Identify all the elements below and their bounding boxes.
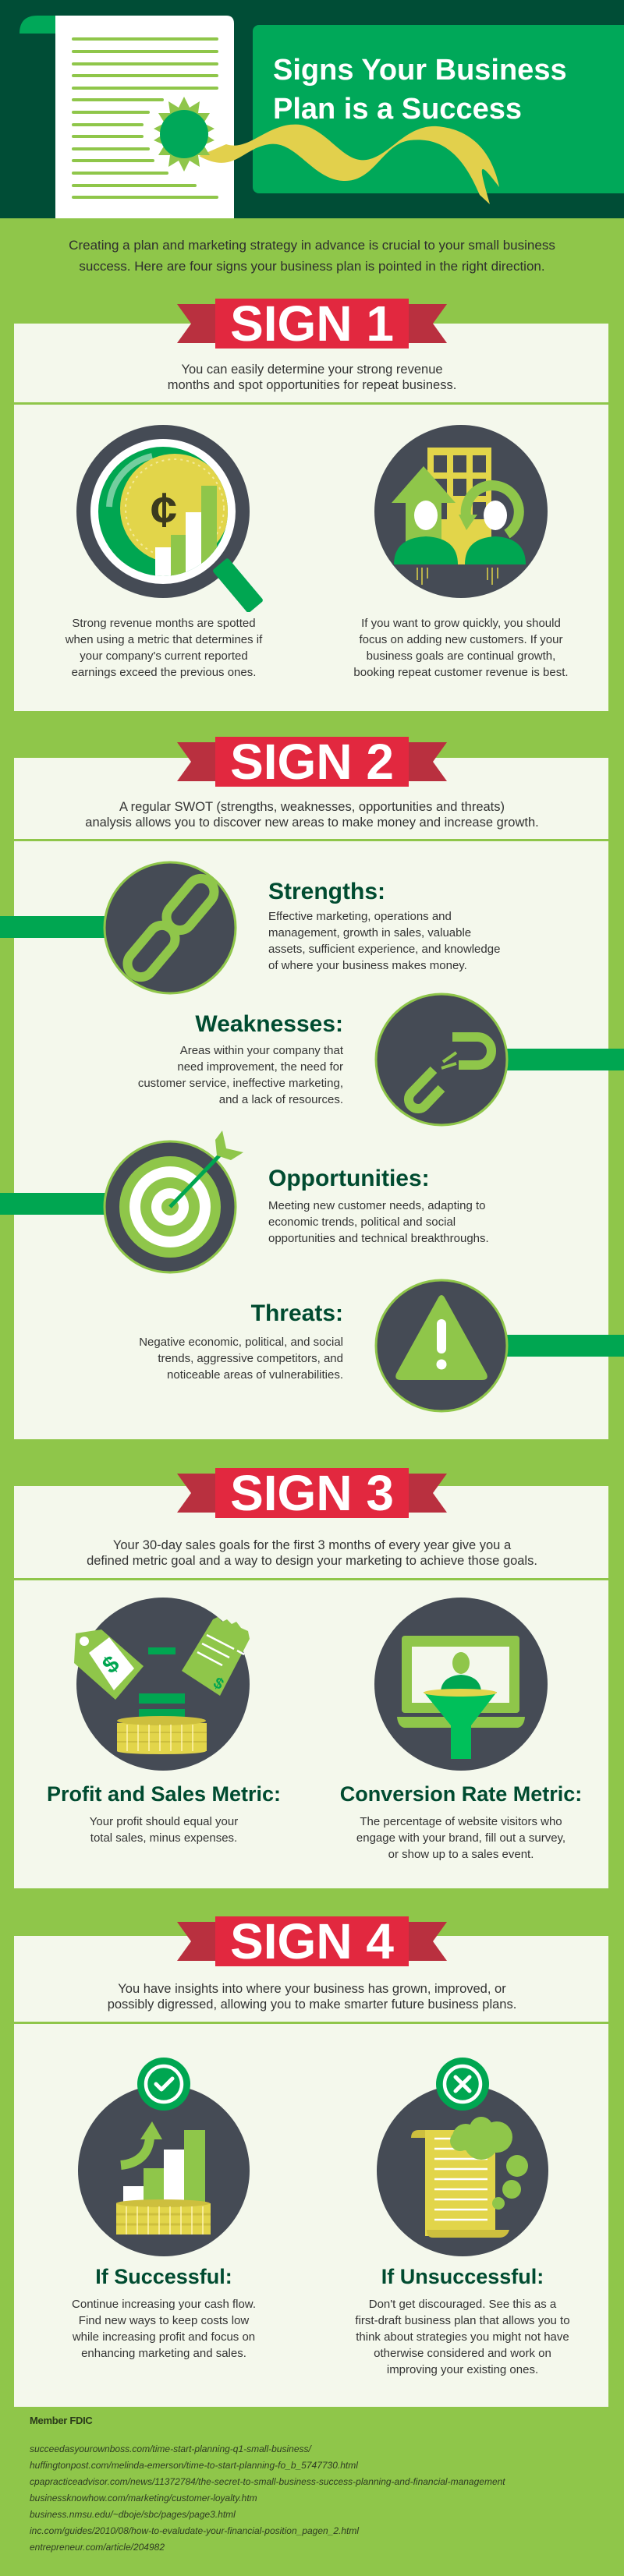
text: grow quickly: business goals are continual growth,	[367, 649, 555, 663]
conversion text	[356, 1815, 566, 1861]
panel: sign 1	[14, 324, 608, 711]
sign 3 intro: Your 30-day sales goals for the first 3 months of every year give you a	[113, 1538, 511, 1552]
footer: sources: entrepreneur.com/article/204982	[30, 2542, 165, 2553]
title: Plan is a Success	[273, 93, 522, 126]
opportunities heading: Opportunities:	[268, 1166, 430, 1191]
footer: sources: cpapracticeadvisor.com/news/11372784/the-secret-to-small-business-success-planning-and-financial-management	[30, 2476, 505, 2487]
text: revenue months: your company's current reported	[80, 649, 248, 663]
unsuccessful text: improving your existing ones.	[387, 2363, 538, 2376]
header banner	[0, 0, 624, 218]
weaknesses text: and a lack of resources.	[219, 1093, 343, 1106]
successful text: Continue increasing your cash flow.	[72, 2298, 256, 2311]
weaknesses text: Areas within your company that	[180, 1044, 343, 1057]
sign 2 intro	[85, 800, 539, 830]
badge: check	[137, 2058, 190, 2111]
sign 3 intro	[87, 1538, 537, 1568]
sign 4 intro: possibly digressed, allowing you to make smarter future business plans.	[108, 1997, 516, 2012]
opportunities text	[268, 1199, 489, 1245]
text: grow quickly	[353, 617, 569, 679]
text: grow quickly: If you want to grow quickly, you should	[361, 617, 561, 630]
unsuccessful heading: If Unsuccessful:	[381, 2265, 544, 2288]
title	[273, 54, 567, 126]
icon: magnifier with coin: ¢	[151, 483, 177, 537]
weaknesses text: customer service, ineffective marketing,	[138, 1077, 343, 1090]
weaknesses text	[138, 1044, 343, 1106]
icon: growth building and customers	[374, 425, 548, 598]
footer: member FDIC: Member FDIC	[30, 2415, 92, 2426]
conversion text: The percentage of website visitors who	[360, 1815, 562, 1828]
profit text	[90, 1815, 238, 1845]
panel: sign 3	[14, 1486, 608, 1888]
connector bars	[0, 916, 109, 938]
panel: sign 4	[14, 1936, 608, 2407]
intro text	[69, 238, 555, 274]
strengths text: Effective marketing, operations and	[268, 910, 452, 923]
sign 1 intro: You can easily determine your strong revenue	[181, 363, 443, 377]
sign 1 intro: months and spot opportunities for repeat business.	[168, 378, 456, 392]
conversion text: engage with your brand, fill out a survey,	[356, 1831, 566, 1845]
unsuccessful text: think about strategies you might not have	[356, 2330, 569, 2344]
sign 2 intro: analysis allows you to discover new areas to make money and increase growth.	[85, 816, 539, 830]
profit text: Your profit should equal your	[90, 1815, 238, 1828]
footer: sources: huffingtonpost.com/melinda-emerson/time-to-start-planning-fo_b_5747730.html	[30, 2460, 358, 2471]
successful text	[72, 2298, 256, 2360]
icon: success growth	[78, 2058, 250, 2256]
icon: magnifier with coin	[76, 425, 263, 612]
opportunities text: opportunities and technical breakthroughs.	[268, 1232, 489, 1245]
unsuccessful text	[355, 2298, 570, 2376]
sign 3 intro: defined metric goal and a way to design your marketing to achieve those goals.	[87, 1554, 537, 1568]
text: revenue months: earnings exceed the previous ones.	[72, 666, 256, 679]
profit heading: Profit and Sales Metric:	[47, 1782, 281, 1806]
icon: warning (threats)	[374, 1279, 509, 1413]
footer: sources: inc.com/guides/2010/08/how-to-evaludate-your-financial-position_pagen_2.html	[30, 2525, 359, 2536]
footer: sources: businessknowhow.com/marketing/customer-loyalty.htm	[30, 2493, 257, 2503]
strengths heading: Strengths:	[268, 879, 385, 904]
unsuccessful text: first-draft business plan that allows you to	[355, 2314, 570, 2327]
footer: sources: succeedasyourownboss.com/time-start-planning-q1-small-business/	[30, 2443, 311, 2454]
sign 4 intro	[108, 1982, 516, 2012]
strengths text: assets, sufficient experience, and knowledge	[268, 943, 500, 956]
icon: profit equation: $	[211, 1674, 226, 1693]
conversion heading: Conversion Rate Metric:	[340, 1782, 582, 1806]
footer: sources: business.nmsu.edu/~dboje/sbc/pages/page3.html	[30, 2509, 236, 2520]
icon: chain (strengths)	[103, 861, 237, 995]
strengths text: management, growth in sales, valuable	[268, 926, 471, 939]
panel: sign 2	[14, 758, 608, 1439]
intro text: Creating a plan and marketing strategy in advance is crucial to your small business	[69, 238, 555, 253]
opportunities text: Meeting new customer needs, adapting to	[268, 1199, 486, 1212]
text: grow quickly: booking repeat customer revenue is best.	[353, 666, 569, 679]
threats text: noticeable areas of vulnerabilities.	[167, 1368, 343, 1382]
conversion text: or show up to a sales event.	[388, 1848, 534, 1861]
text: grow quickly: focus on adding new customers. If your	[359, 633, 562, 646]
threats text: Negative economic, political, and social	[139, 1336, 343, 1349]
profit text: total sales, minus expenses.	[90, 1831, 237, 1845]
icon: conversion funnel monitor	[374, 1598, 548, 1771]
ribbon: sign 4	[177, 1916, 447, 1966]
weaknesses heading: Weaknesses:	[195, 1011, 343, 1037]
icon: profit equation: $	[98, 1651, 125, 1679]
ribbon: sign 2	[177, 737, 447, 787]
icon: profit equation	[74, 1598, 250, 1771]
successful text: while increasing profit and focus on	[73, 2330, 255, 2344]
threats text: trends, aggressive competitors, and	[158, 1352, 343, 1365]
icon: broken chain (weaknesses)	[374, 993, 509, 1126]
text: revenue months	[66, 617, 262, 679]
weaknesses text: need improvement, the need for	[177, 1060, 343, 1074]
sign 1 intro	[168, 363, 456, 392]
ribbon: sign 3	[177, 1468, 447, 1518]
opportunities text: economic trends, political and social	[268, 1215, 456, 1229]
icon: unsuccessful scroll	[377, 2058, 548, 2256]
strengths text: of where your business makes money.	[268, 959, 467, 972]
title: Signs Your Business	[273, 54, 567, 87]
strengths text	[268, 910, 500, 972]
successful text: Find new ways to keep costs low	[79, 2314, 249, 2327]
threats text	[139, 1336, 343, 1382]
icon: target (opportunities)	[103, 1131, 243, 1274]
threats heading: Threats:	[251, 1300, 343, 1326]
badge: cross	[436, 2058, 489, 2111]
ribbon: sign 1	[177, 299, 447, 349]
unsuccessful text: Don't get discouraged. See this as a	[369, 2298, 556, 2311]
footer: sources	[30, 2443, 505, 2553]
unsuccessful text: otherwise considered and work on	[374, 2347, 551, 2360]
sign 2 intro: A regular SWOT (strengths, weaknesses, opportunities and threats)	[119, 800, 505, 814]
sign 4 intro: You have insights into where your business has grown, improved, or	[118, 1982, 506, 1996]
text: revenue months: when using a metric that determines if	[66, 633, 262, 646]
successful heading: If Successful:	[95, 2265, 232, 2288]
intro text: success. Here are four signs your business plan is pointed in the right direction.	[79, 259, 545, 274]
successful text: enhancing marketing and sales.	[81, 2347, 246, 2360]
text: revenue months: Strong revenue months are spotted	[72, 617, 256, 630]
